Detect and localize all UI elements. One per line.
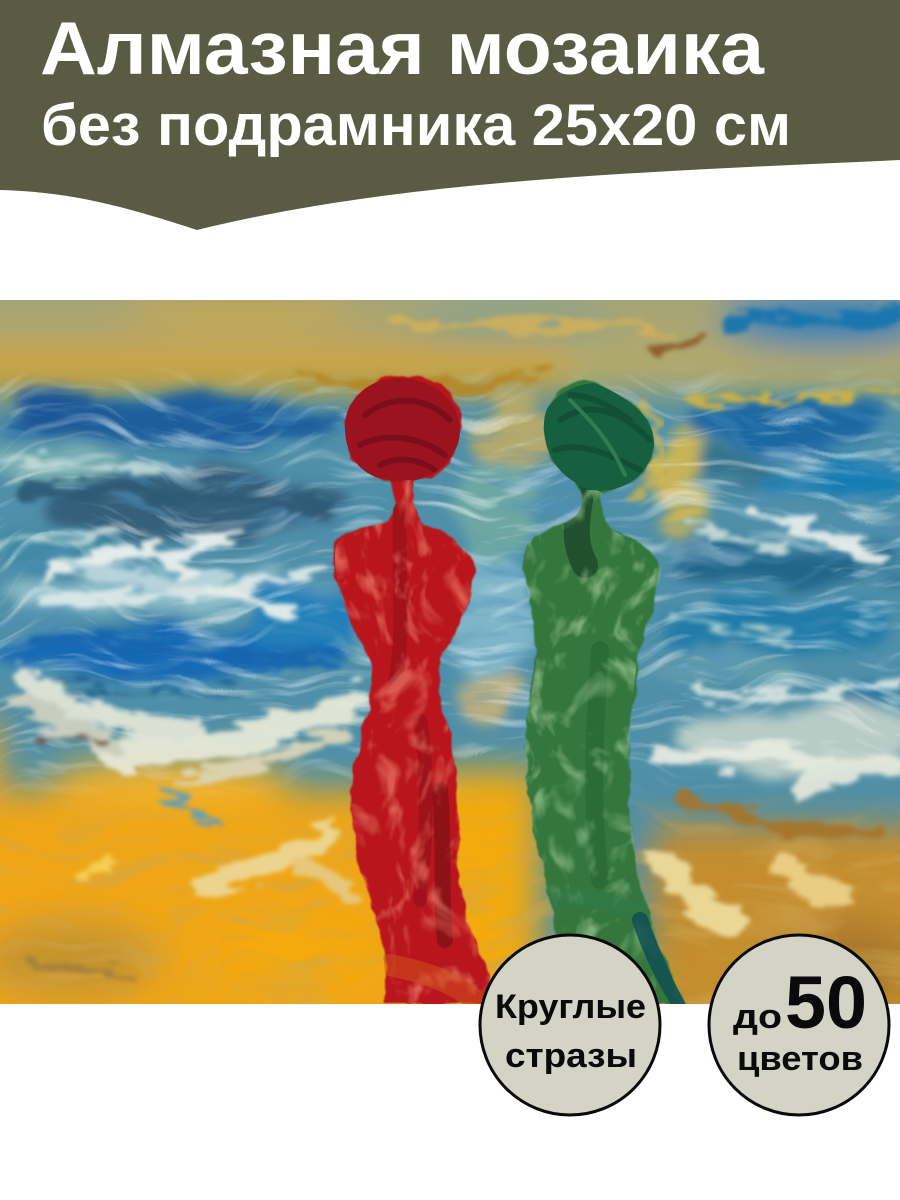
badge: round rhinestones: стразы	[505, 1037, 637, 1075]
sea: blue bands, left side	[0, 390, 550, 721]
badge: round rhinestones	[480, 935, 660, 1115]
subtitle: без подрамника 25х20 см	[41, 93, 791, 158]
badge: up to 50 colours	[709, 935, 889, 1115]
green figure silhouette	[524, 381, 686, 1004]
sky: ochre and teal	[0, 270, 900, 393]
green figure brush strokes	[524, 383, 686, 1004]
badge: up to 50 colours: до	[733, 998, 782, 1036]
header banner	[0, 0, 900, 230]
sea: blue bands, right side	[650, 399, 900, 778]
red figure brush strokes	[335, 378, 490, 1004]
title: Алмазная мозаика	[40, 6, 765, 90]
sand: yellow and ochre	[0, 720, 900, 1050]
green figure	[521, 378, 686, 1004]
sea and sky brush texture, light	[0, 369, 900, 795]
red figure silhouette	[335, 376, 495, 1004]
badge: round rhinestones: Круглые	[495, 988, 646, 1026]
badge: up to 50 colours: цветов	[737, 1040, 863, 1078]
badge: up to 50 colours: 50	[785, 961, 867, 1044]
painting: two figures by the sea	[0, 300, 900, 1004]
halo around green head	[625, 405, 661, 505]
red figure	[332, 374, 491, 1004]
sand brush texture	[0, 799, 900, 1004]
painting base colour	[0, 300, 900, 1004]
white foam strokes	[0, 310, 900, 975]
sea brush texture, dark blue	[0, 393, 900, 706]
